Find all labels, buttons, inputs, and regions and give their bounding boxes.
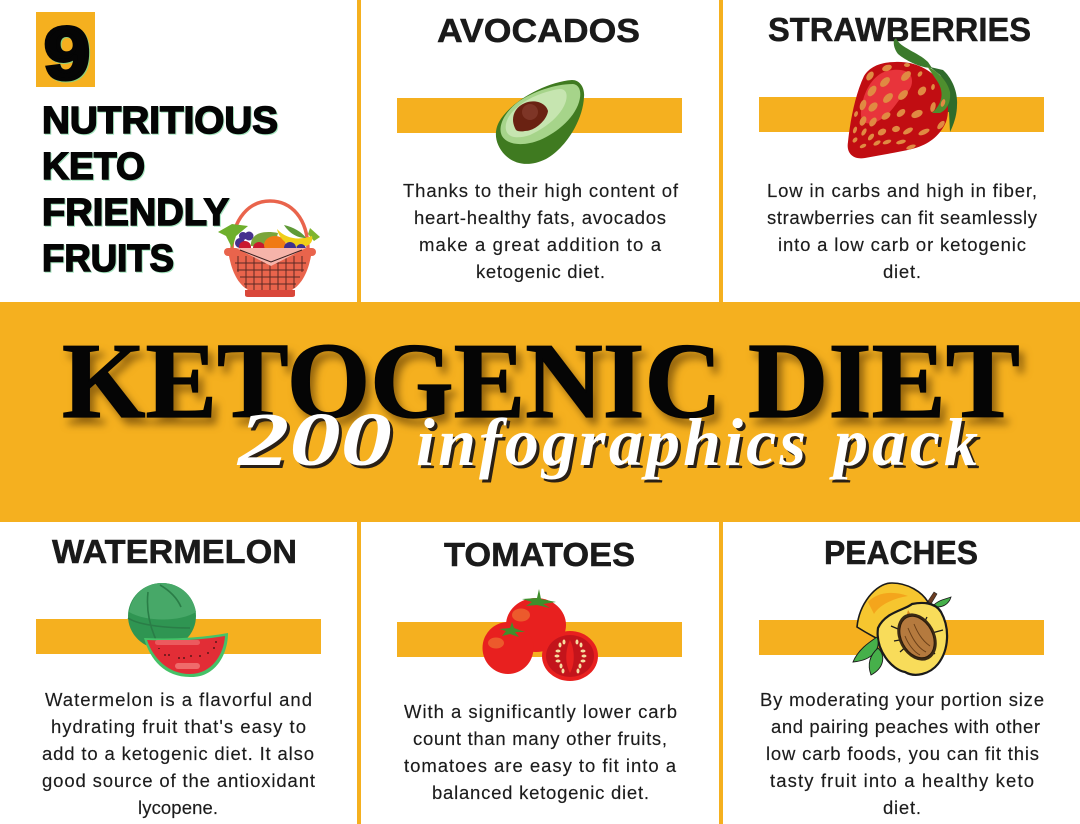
- subtitle: 200: [237, 398, 392, 482]
- accent bar: [759, 97, 1044, 132]
- subtitle: infographics: [416, 404, 806, 480]
- body text: Thanks to their high content of: [403, 180, 679, 201]
- heading: TOMATOES: [444, 536, 635, 573]
- accent bar: [397, 98, 682, 133]
- accent bar: [759, 620, 1044, 655]
- main title: DIET: [748, 322, 1020, 441]
- icon: tomatoes: [482, 589, 598, 681]
- body text: [760, 689, 1044, 818]
- heading: WATERMELON: [52, 533, 297, 570]
- body text: balanced ketogenic diet.: [432, 782, 649, 803]
- panel: watermelon: [36, 533, 321, 818]
- heading: nutritious keto friendly fruits: [42, 100, 278, 280]
- panel: peaches: [759, 534, 1044, 818]
- body text: By moderating your portion size: [760, 689, 1044, 710]
- body text: diet.: [883, 797, 921, 818]
- panel: tomatoes: [397, 536, 682, 803]
- main title: KETOGENIC: [62, 322, 722, 441]
- body text: make a great addition to a: [419, 234, 662, 255]
- body text: With a significantly lower carb: [404, 701, 677, 722]
- number badge: [36, 12, 95, 95]
- heading: AVOCADOS: [437, 12, 640, 49]
- body text: Low in carbs and high in fiber,: [767, 180, 1037, 201]
- body text: lycopene.: [138, 797, 218, 818]
- body text: hydrating fruit that's easy to: [51, 716, 306, 737]
- body text: low carb foods, you can fit this: [766, 743, 1039, 764]
- body text: strawberries can fit seamlessly: [767, 207, 1038, 228]
- accent bar: [397, 622, 682, 657]
- icon: peach: [853, 583, 951, 675]
- body text: [767, 180, 1038, 282]
- body text: heart-healthy fats, avocados: [414, 207, 666, 228]
- heading: nutritious keto friendly fruits: KETO: [42, 146, 145, 188]
- icon: avocado: [496, 80, 584, 164]
- heading: STRAWBERRIES: [768, 11, 1031, 48]
- body text: good source of the antioxidant: [42, 770, 315, 791]
- body text: ketogenic diet.: [476, 261, 605, 282]
- subtitle: [237, 398, 978, 482]
- heading: nutritious keto friendly fruits: FRUITS: [42, 238, 174, 280]
- panel: strawberries: [759, 11, 1044, 282]
- icon: fruit basket: [218, 201, 320, 297]
- body text: [404, 701, 677, 803]
- body text: diet.: [883, 261, 921, 282]
- accent bar: [36, 619, 321, 654]
- panel: avocados: [397, 12, 682, 282]
- body text: [403, 180, 679, 282]
- body text: into a low carb or ketogenic: [778, 234, 1026, 255]
- body text: and pairing peaches with other: [771, 716, 1040, 737]
- number badge: 9: [44, 12, 90, 95]
- heading: nutritious keto friendly fruits: NUTRITIOUS: [42, 100, 278, 142]
- heading: nutritious keto friendly fruits: FRIENDLY: [42, 192, 229, 234]
- heading: PEACHES: [824, 534, 978, 571]
- icon: watermelon: [128, 583, 228, 677]
- body text: add to a ketogenic diet. It also: [42, 743, 314, 764]
- body text: tomatoes are easy to fit into a: [404, 755, 677, 776]
- icon: strawberry: [848, 38, 957, 158]
- body text: count than many other fruits,: [413, 728, 667, 749]
- panel: intro title: [36, 12, 320, 297]
- main title: [62, 322, 1020, 441]
- body text: Watermelon is a flavorful and: [45, 689, 312, 710]
- subtitle: pack: [829, 404, 978, 480]
- banner: ketogenic diet: [0, 302, 1080, 522]
- body text: tasty fruit into a healthy keto: [770, 770, 1034, 791]
- body text: [42, 689, 315, 818]
